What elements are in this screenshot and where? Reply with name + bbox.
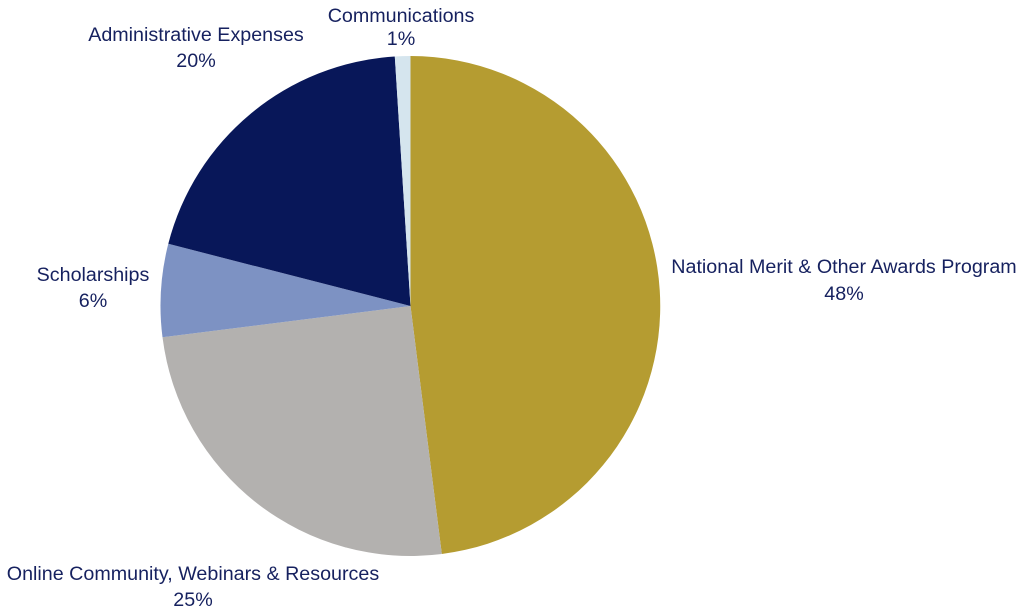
pie slice: Administrative Expenses 20%: [168, 56, 410, 306]
pie slice: Communications 1%: [395, 56, 410, 306]
pie slice: Online Community, Webinars & Resources 25%: [162, 306, 442, 556]
label: Online Community, Webinars & Resources: Online Community, Webinars & Resources: [7, 563, 379, 585]
label: Communications: Communications: [328, 5, 474, 27]
label: Online Community, Webinars & Resources: [7, 563, 379, 611]
label: Scholarships: [37, 264, 150, 312]
label: Scholarships: Scholarships: [37, 264, 150, 286]
pie slice: Scholarships 6%: [161, 244, 410, 337]
label: Communications: 1%: [387, 28, 415, 50]
label: Administrative Expenses: Administrative Expenses: [88, 24, 304, 46]
label: Online Community, Webinars & Resources: 25%: [173, 589, 213, 611]
label: National Merit & Other Awards Program: 48%: [824, 283, 864, 305]
pie slice: National Merit & Other Awards Program 48%: [410, 56, 660, 554]
label: National Merit & Other Awards Program: National Merit & Other Awards Program: [671, 256, 1017, 278]
label: Communications: [328, 5, 474, 50]
label: Administrative Expenses: [88, 24, 304, 72]
label: Scholarships: 6%: [79, 290, 107, 312]
label: National Merit & Other Awards Program: [671, 256, 1017, 305]
label: Administrative Expenses: 20%: [176, 50, 216, 72]
